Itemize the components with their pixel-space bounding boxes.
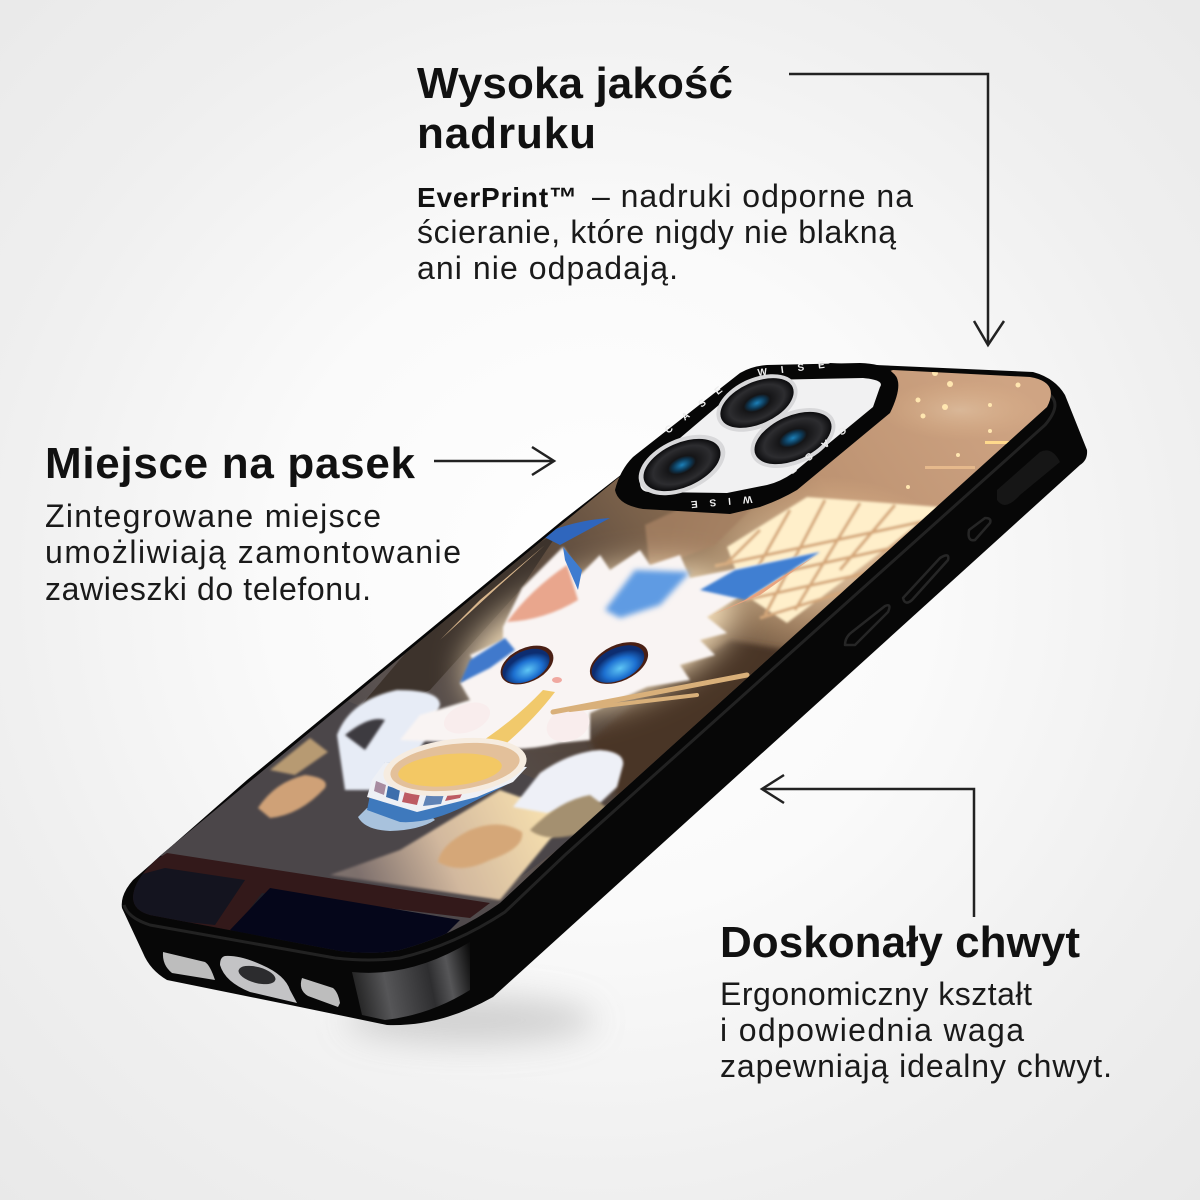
case body [122,363,1087,1025]
text: print quality [417,178,913,286]
left ear [507,565,578,622]
ports [163,952,340,1007]
brand ring text upper [663,358,839,436]
bowl white band [367,762,527,812]
arrow: grip [762,775,974,917]
brand ring text lower: CASE [775,424,848,484]
right haunch [513,750,623,813]
text: strap slot: Zintegrowane miejsce [45,498,381,534]
brand ring text lower [678,424,848,510]
lens right [741,396,845,480]
text: grip: zapewniają idealny chwyt. [720,1048,1112,1084]
right ear [700,552,820,600]
lens top [708,363,806,443]
arrow: strap slot [434,447,554,475]
corner sheen [352,942,470,1020]
brand ring text upper: CASE [663,376,736,436]
text: grip: i odpowiednia waga [720,1012,1024,1048]
right speaker [301,978,340,1007]
night floor [230,888,460,960]
phone case [100,350,1100,1025]
heading: strap slot: Miejsce na pasek [45,439,416,488]
lit table area [330,790,570,900]
paws [440,697,494,739]
noodle bowl [358,730,530,831]
text: strap slot: umożliwiają zamontowanie [45,534,461,570]
dark room behind cat [590,640,790,800]
left speaker [163,952,215,980]
side switch [997,450,1060,505]
text: strap slot: zawieszki do telefonu. [45,571,371,607]
left haunch [337,690,440,790]
text: strap slot [45,498,461,607]
light halo [447,535,753,745]
arrow: print quality [789,74,1004,345]
brand ring text upper: WISE [757,358,839,379]
island window [640,378,881,493]
chopsticks [553,675,747,712]
table [160,701,602,881]
text: print quality: – nadruki odporne na [592,178,913,214]
text: grip: Ergonomiczny kształt [720,976,1032,1012]
sparkles [906,370,1020,489]
body and head [400,547,820,749]
bowl foot [358,808,435,831]
bowl blue body [367,762,527,822]
glowing window [644,489,938,635]
noodle strand [486,690,555,742]
camera island [615,358,898,514]
warm light [914,393,1004,427]
case back artwork [133,370,1051,953]
heading: print quality [417,59,733,158]
charging port [220,956,297,1003]
bowl pattern [374,781,466,806]
blue hair [605,570,690,618]
brand ring text lower: WISE [678,493,753,510]
side buttons [845,518,990,645]
heading: print quality: nadruku [417,109,596,158]
text: grip [720,976,1112,1084]
text: print quality: ani nie odpadają. [417,250,678,286]
eyes [500,646,554,684]
heading: print quality: Wysoka jakość [417,59,733,108]
lens left [629,423,735,507]
text: print quality: EverPrint™ [417,182,577,213]
red band [130,853,490,935]
biscuits [258,738,610,868]
text: print quality: ścieranie, które nigdy nie blakną [417,214,896,250]
rim lip [124,395,1055,960]
kitten [337,535,820,813]
heading: grip: Doskonały chwyt [720,918,1080,967]
phone shadow [345,996,595,1044]
